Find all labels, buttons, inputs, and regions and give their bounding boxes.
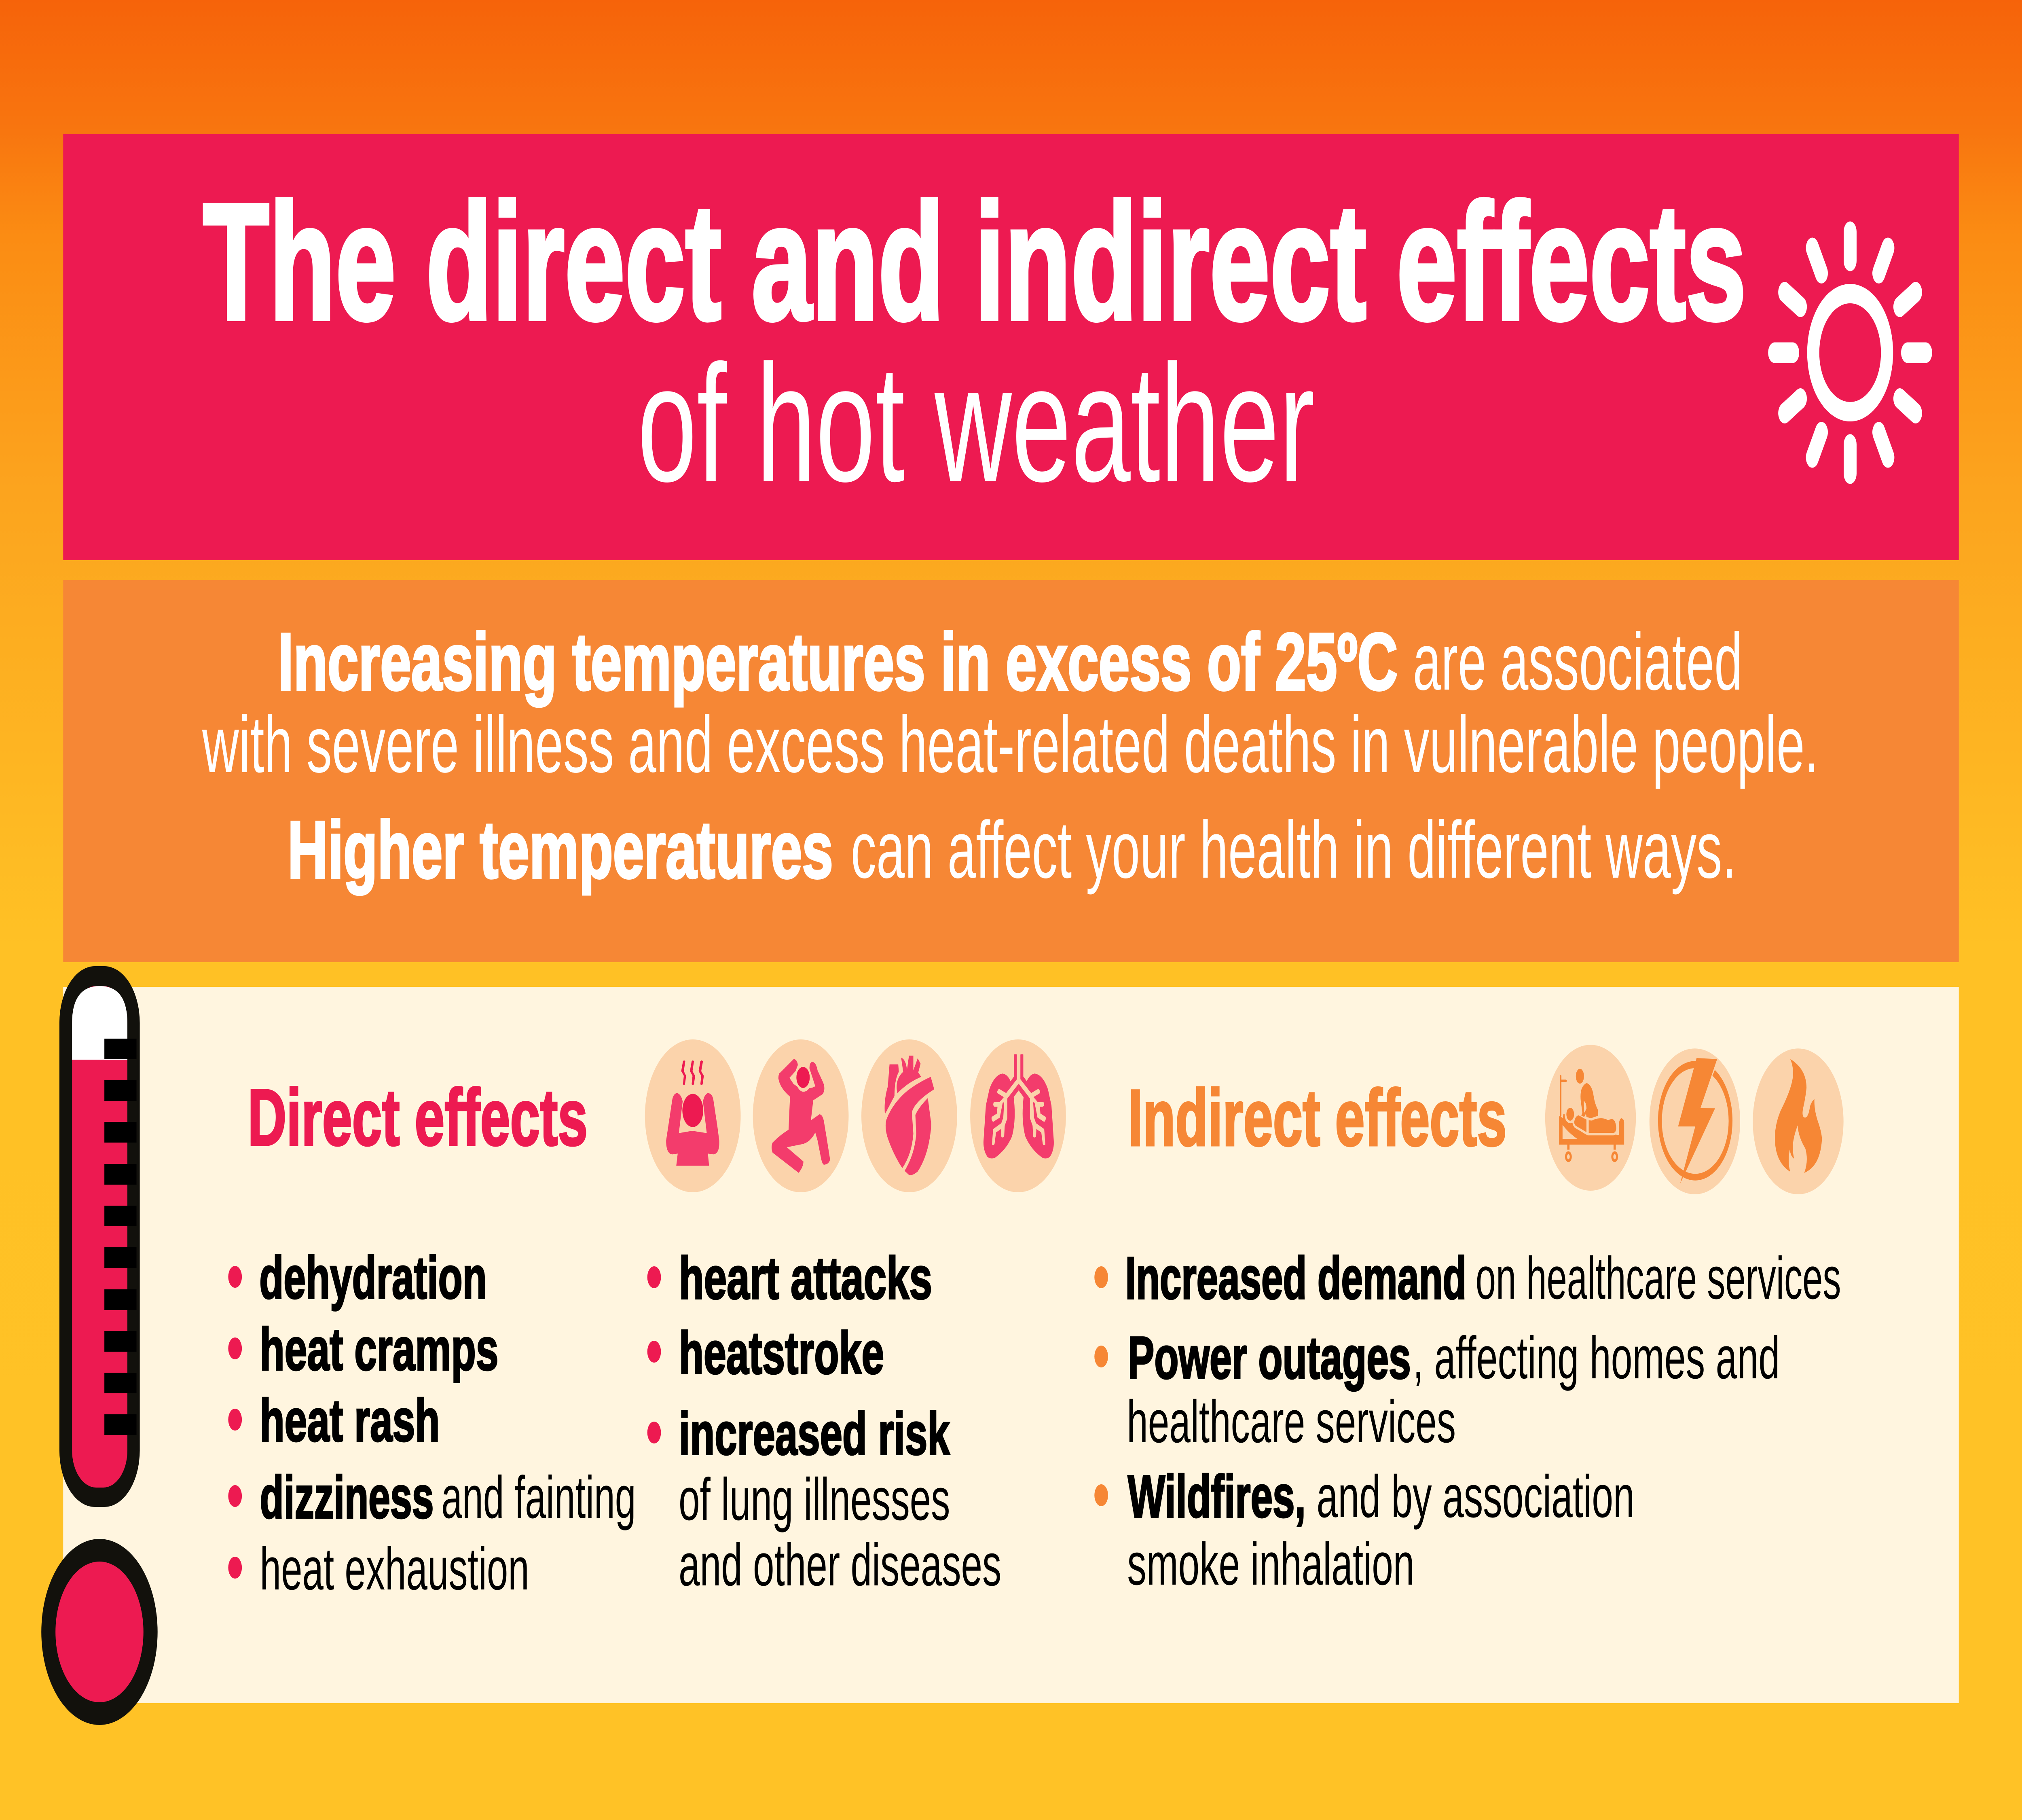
list: indirect effects: healthcare services: [1127, 1388, 1456, 1455]
list: indirect effects: and by association: [1317, 1463, 1635, 1530]
panel: effects: [63, 987, 1959, 1703]
icon: overheated person: [645, 1039, 741, 1192]
icon: heart: [861, 1039, 957, 1192]
list: indirect effects: [1094, 1245, 1841, 1598]
intro line 3: can affect your health in different ways.: [851, 805, 1736, 895]
intro line 2: with severe illness and excess heat-related deaths in vulnerable people.: [202, 700, 1819, 789]
icon: flame: [1753, 1048, 1844, 1194]
icons: direct effects: [645, 1039, 1066, 1192]
icon: person with cramps: [753, 1039, 848, 1192]
panel: title banner: [63, 134, 1959, 560]
list: direct effects column 1: heat cramps: [260, 1316, 498, 1383]
list: direct effects column 2: increased risk: [679, 1401, 950, 1467]
list: direct effects column 1: and fainting: [441, 1464, 636, 1531]
list: indirect effects: , affecting homes and: [1413, 1325, 1780, 1391]
list: direct effects column 2: [647, 1245, 1001, 1598]
icon: thermometer: [41, 966, 158, 1725]
list: direct effects column 2: heart attacks: [679, 1245, 932, 1312]
list: indirect effects: Power outages: [1128, 1325, 1411, 1391]
list: direct effects column 1: heat exhaustion: [260, 1536, 529, 1602]
list: indirect effects: smoke inhalation: [1127, 1531, 1414, 1598]
heading: indirect effects: Indirect effects: [1128, 1073, 1507, 1162]
panel: introduction: [63, 580, 1959, 962]
icon: sun: [1775, 232, 1926, 474]
list: direct effects column 1: dehydration: [259, 1244, 487, 1311]
list: direct effects column 1: heat rash: [260, 1387, 440, 1454]
icons: indirect effects: [1545, 1045, 1844, 1194]
heading: direct effects: Direct effects: [247, 1073, 588, 1162]
title line 2: of hot weather: [637, 330, 1315, 516]
list: indirect effects: Wildfires,: [1128, 1463, 1306, 1530]
list: direct effects column 2: and other diseases: [679, 1532, 1001, 1598]
list: direct effects column 1: [228, 1244, 636, 1602]
list: direct effects column 2: heatstroke: [679, 1320, 884, 1386]
icon: power outage bolt: [1650, 1048, 1740, 1194]
intro line 1: are associated: [1413, 617, 1743, 707]
list: direct effects column 2: of lung illnesses: [679, 1466, 950, 1533]
list: direct effects column 1: dizziness: [260, 1464, 434, 1531]
intro line 1: [278, 617, 1743, 707]
list: indirect effects: Increased demand: [1125, 1245, 1466, 1312]
icon: hospital bed: [1545, 1045, 1636, 1191]
icon: lungs: [970, 1039, 1066, 1192]
title line 1: The direct and indirect effects: [203, 170, 1746, 355]
list: indirect effects: on healthcare services: [1476, 1245, 1841, 1312]
intro line 1: Increasing temperatures in excess of 25ºC: [278, 617, 1398, 707]
intro line 3: Higher temperatures: [288, 805, 833, 895]
intro line 3: [288, 805, 1736, 895]
